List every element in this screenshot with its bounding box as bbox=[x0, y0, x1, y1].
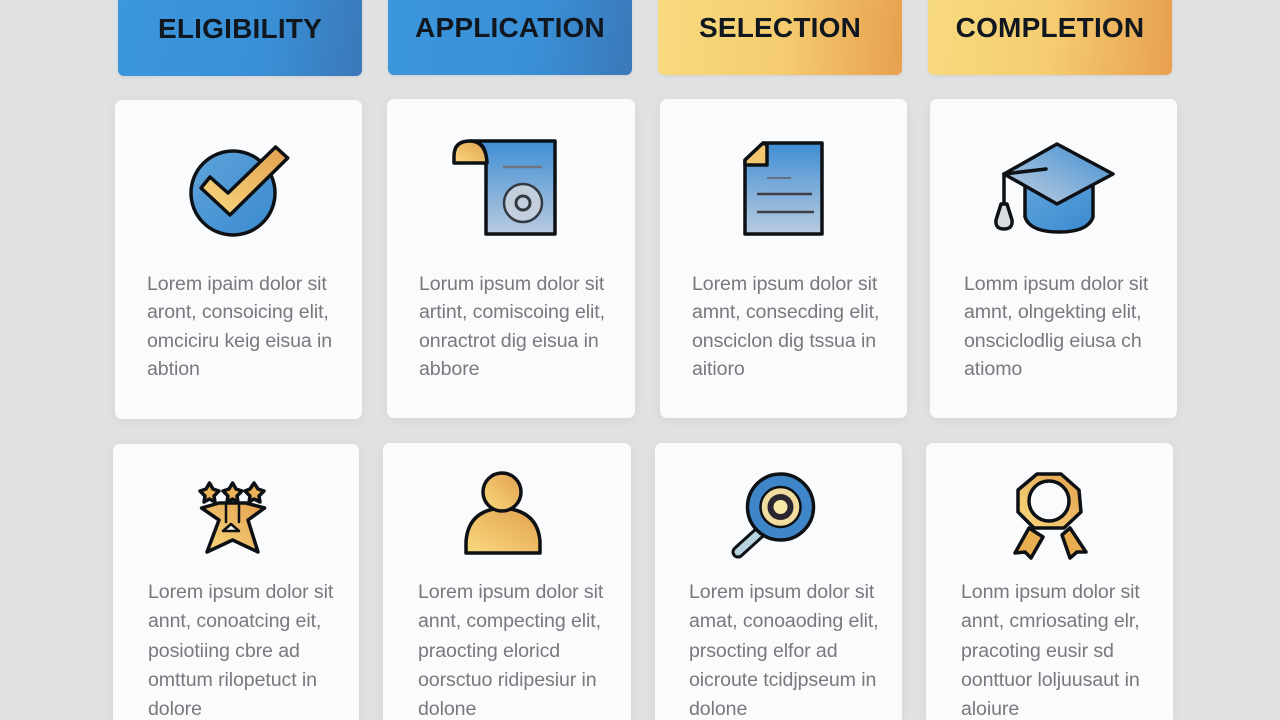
text block: Lorem ipsum dolor sit bbox=[692, 273, 877, 295]
text block: annt, cmriosating elr, bbox=[961, 610, 1140, 632]
text block: aloiure bbox=[961, 698, 1019, 720]
text block: amat, conoaoding elit, bbox=[689, 610, 879, 632]
text block bbox=[148, 581, 334, 720]
icon: check mark in circle bbox=[189, 145, 290, 237]
icon: award rosette bbox=[1013, 472, 1088, 560]
text block: abbore bbox=[419, 358, 479, 380]
text block: dolore bbox=[148, 698, 202, 720]
text block: onsciclon dig tssua in bbox=[692, 330, 876, 352]
text block: oonttuor loljuusaut in bbox=[961, 669, 1140, 691]
panel: eligibility top card bbox=[115, 100, 362, 419]
heading: eligibility: ELIGIBILITY bbox=[158, 13, 322, 44]
text block bbox=[419, 273, 605, 380]
text block bbox=[147, 273, 332, 380]
heading: selection: SELECTION bbox=[699, 12, 861, 43]
icon: magnifying glass bbox=[732, 472, 816, 558]
text block bbox=[692, 273, 879, 380]
text block: prsocting elfor ad bbox=[689, 640, 838, 662]
text block: onsciclodlig eiusa ch bbox=[964, 330, 1142, 352]
panel: selection top card bbox=[660, 99, 907, 418]
text block: onractrot dig eisua in bbox=[419, 330, 599, 352]
icon: scroll with seal bbox=[452, 139, 557, 236]
text block bbox=[961, 581, 1140, 720]
heading: application: APPLICATION bbox=[415, 12, 605, 43]
heading: eligibility bbox=[118, 0, 362, 76]
text block: dolone bbox=[418, 698, 476, 720]
text block: oicroute tcidjpseum in bbox=[689, 669, 876, 691]
text block: aront, consoicing elit, bbox=[147, 301, 329, 323]
heading: completion: COMPLETION bbox=[956, 12, 1144, 43]
text block: amnt, olngekting elit, bbox=[964, 301, 1142, 323]
text block bbox=[418, 581, 604, 720]
text block: Lorem ipsum dolor sit bbox=[689, 581, 874, 603]
text block: annt, conoatcing eit, bbox=[148, 610, 321, 632]
text block: omttum rilopetuct in bbox=[148, 669, 317, 691]
text block: Lorem ipsum dolor sit bbox=[418, 581, 603, 603]
text block: Lonm ipsum dolor sit bbox=[961, 581, 1140, 603]
text block: dolone bbox=[689, 698, 747, 720]
panel: completion top card bbox=[930, 99, 1177, 418]
text block: Lorum ipsum dolor sit bbox=[419, 273, 604, 295]
icon: document bbox=[743, 141, 824, 236]
text block: pracoting eusir sd bbox=[961, 640, 1114, 662]
text block: omciciru keig eisua in bbox=[147, 330, 332, 352]
icon: person bbox=[464, 471, 542, 555]
text block: annt, compecting elit, bbox=[418, 610, 601, 632]
text block: amnt, consecding elit, bbox=[692, 301, 879, 323]
icon: graduation cap bbox=[994, 142, 1115, 234]
text block: atiomo bbox=[964, 358, 1022, 380]
panel: application bottom card bbox=[383, 443, 631, 720]
text block: Lorem ipaim dolor sit bbox=[147, 273, 327, 295]
text block: Lorem ipsum dolor sit bbox=[148, 581, 333, 603]
panel: eligibility bottom card bbox=[113, 444, 359, 720]
text block: aitioro bbox=[692, 358, 745, 380]
heading: completion bbox=[928, 0, 1172, 75]
icon: three stars lion bbox=[198, 481, 266, 554]
heading: application bbox=[388, 0, 632, 75]
text block: posiotiing cbre ad bbox=[148, 640, 300, 662]
heading: selection bbox=[658, 0, 902, 75]
text block: Lomm ipsum dolor sit bbox=[964, 273, 1148, 295]
panel: completion bottom card bbox=[926, 443, 1173, 720]
panel: application top card bbox=[387, 99, 635, 418]
text block bbox=[689, 581, 879, 720]
text block bbox=[964, 273, 1148, 380]
text block: abtion bbox=[147, 358, 200, 380]
text block: praocting eloricd bbox=[418, 640, 560, 662]
panel: selection bottom card bbox=[655, 443, 902, 720]
text block: oorsctuo ridipesiur in bbox=[418, 669, 597, 691]
text block: artint, comiscoing elit, bbox=[419, 301, 605, 323]
